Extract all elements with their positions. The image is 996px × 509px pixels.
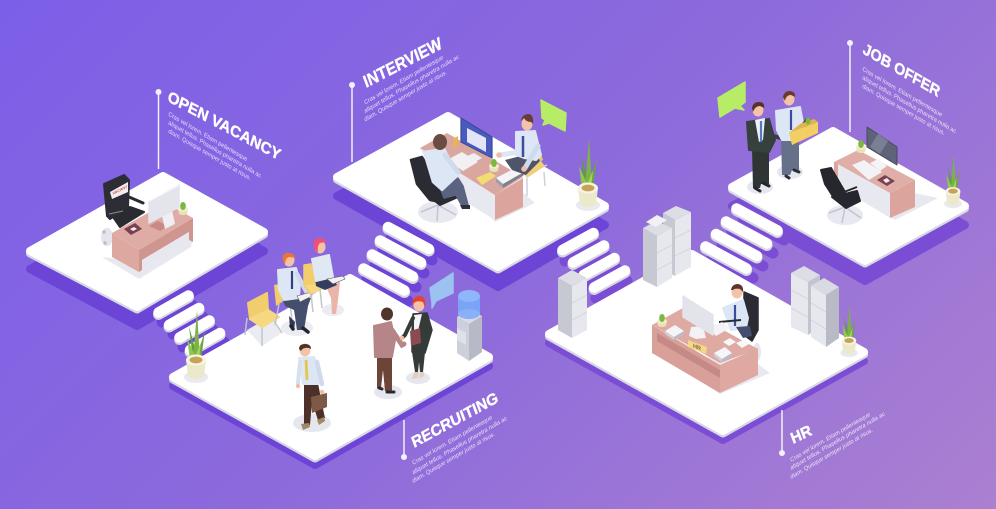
stairs: vacancy to recruiting — [158, 296, 224, 359]
seated woman — [304, 238, 345, 316]
computer monitor — [867, 127, 897, 165]
callout: recruiting — [401, 389, 508, 485]
small desk plant — [489, 159, 499, 172]
applicant in chair — [411, 134, 470, 223]
small desk plant — [657, 314, 667, 327]
text block: Cras vel lorem. Etiam pellentesque — [861, 67, 943, 119]
stairs: interview to hr — [562, 233, 627, 298]
callout: hr — [779, 410, 886, 481]
office chair — [821, 168, 863, 225]
platform: interview — [337, 116, 605, 270]
text block: aliquet tellus. Phasellus pharetra nulla ac — [861, 75, 957, 135]
seated man — [274, 253, 313, 336]
pin — [401, 420, 407, 460]
heading: HR — [788, 422, 814, 448]
desk items — [665, 322, 749, 362]
callout: open vacancy — [156, 88, 283, 182]
interviewer chair — [520, 135, 547, 196]
text block: diam. Quisque semper justo at risus. — [364, 70, 448, 123]
speech bubble — [541, 100, 566, 131]
text block: aliquet tellus. Phasellus pharetra nulla ac — [167, 120, 262, 180]
platform: recruiting — [173, 278, 489, 458]
interviewer — [496, 114, 541, 175]
filing cabinet left — [558, 270, 587, 338]
pin — [779, 410, 785, 456]
desk shadow — [470, 190, 535, 222]
nameplate — [688, 340, 707, 354]
desk — [420, 133, 523, 220]
callout: interview — [349, 33, 460, 162]
man holding box — [776, 91, 818, 179]
man in pink jacket — [374, 308, 404, 399]
text block: diam. Quisque semper justo at risus. — [167, 129, 252, 182]
text block: aliquet tellus. Phasellus pharetra nulla ac — [790, 411, 886, 472]
man with briefcase — [293, 344, 331, 432]
heading: JOB OFFER — [861, 41, 942, 101]
panel: recruiting — [173, 238, 489, 458]
text block: aliquet tellus. Phasellus pharetra nulla ac — [364, 54, 460, 115]
panel: interview — [337, 100, 605, 270]
speech bubble — [430, 273, 453, 308]
desk shadow — [655, 352, 770, 394]
pin — [847, 40, 853, 132]
text block: diam. Quisque semper justo at risus. — [790, 427, 874, 481]
small desk plant — [178, 202, 188, 215]
panel: open vacancy — [30, 175, 264, 310]
text block: Cras vel lorem. Etiam pellentesque — [167, 112, 248, 164]
computer monitor — [149, 184, 179, 229]
panel: job offer — [718, 82, 965, 264]
desk — [112, 203, 193, 272]
desk shadow — [860, 190, 938, 220]
text block: Cras vel lorem. Etiam pellentesque — [364, 55, 445, 106]
text block: diam. Quisque semper justo at risus. — [412, 431, 496, 485]
hr employee with chair — [719, 284, 761, 361]
text block: Cras vel lorem. Etiam pellentesque — [412, 415, 494, 467]
platform: job offer — [732, 131, 965, 264]
plant — [184, 310, 208, 383]
desk — [652, 308, 758, 393]
computer monitor — [461, 118, 492, 158]
desk items — [447, 136, 524, 188]
speech bubble — [718, 82, 745, 117]
woman in black suit — [400, 296, 432, 384]
platform: open vacancy — [30, 176, 264, 310]
text block: aliquet tellus. Phasellus pharetra nulla ac — [412, 416, 508, 476]
stairs: hr to job offer — [706, 208, 784, 278]
text block: Cras vel lorem. Etiam pellentesque — [790, 412, 872, 464]
heading: INTERVIEW — [361, 33, 445, 92]
small desk plant — [856, 140, 866, 153]
desk — [834, 150, 915, 218]
pin — [349, 82, 355, 162]
text block: diam. Quisque semper justo at risus. — [861, 84, 946, 137]
office chair with vacant sign: VACANT — [112, 184, 128, 196]
empty chair — [245, 293, 283, 346]
office chair with vacant sign — [101, 175, 144, 246]
filing cabinet pair back — [643, 206, 691, 287]
man in suit — [747, 102, 788, 194]
computer monitor — [683, 296, 713, 339]
platform shadows — [30, 135, 965, 465]
stairs: recruiting to interview — [364, 227, 432, 301]
plant — [840, 305, 858, 357]
heading: RECRUITING — [409, 389, 501, 452]
heading: OPEN VACANCY — [165, 88, 283, 165]
callout: job offer — [847, 40, 957, 137]
pin — [156, 89, 162, 169]
filing cabinet pair right — [791, 266, 839, 347]
platform: hr — [549, 254, 864, 434]
panel: hr — [549, 206, 864, 434]
water cooler — [457, 290, 482, 361]
plant — [944, 154, 962, 208]
nameplate: HR — [693, 344, 702, 353]
plant — [576, 138, 600, 211]
desk items — [852, 159, 895, 186]
desk shadow — [102, 236, 193, 279]
